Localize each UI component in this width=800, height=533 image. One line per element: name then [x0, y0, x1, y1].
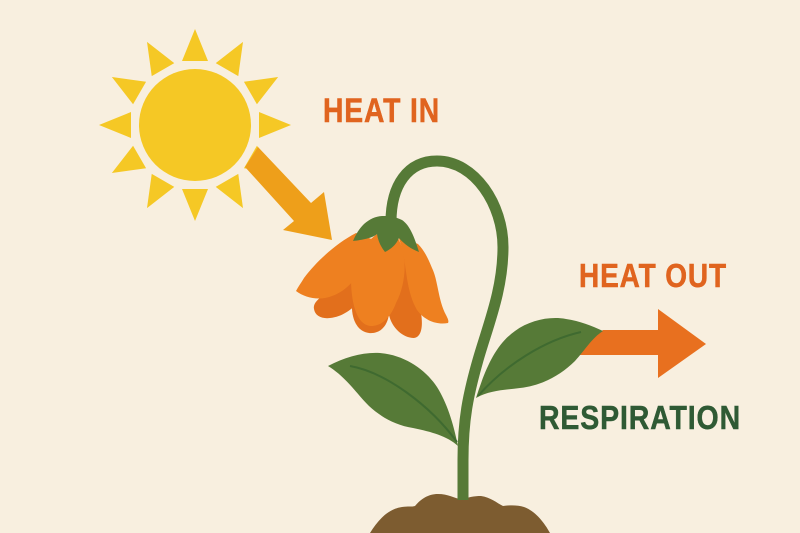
leaf: right	[476, 318, 603, 398]
petal: lower dark right	[389, 250, 422, 338]
label: respiration: RESPIRATION	[539, 399, 741, 436]
flower	[296, 216, 448, 338]
label: heat in: HEAT IN	[323, 92, 440, 130]
label: heat out: HEAT OUT	[579, 257, 727, 294]
leaf: left	[328, 353, 458, 446]
soil mound	[370, 494, 550, 533]
icon: sun	[99, 29, 291, 221]
petal: lower dark left	[314, 270, 362, 318]
petal: lower dark center	[352, 303, 389, 333]
calyx	[353, 216, 419, 252]
petal: center	[351, 234, 405, 326]
arrow: heat in	[245, 147, 332, 240]
arrow: heat out	[570, 309, 706, 378]
stem	[391, 161, 503, 500]
petal: left	[296, 233, 374, 298]
petal: right	[398, 236, 448, 323]
